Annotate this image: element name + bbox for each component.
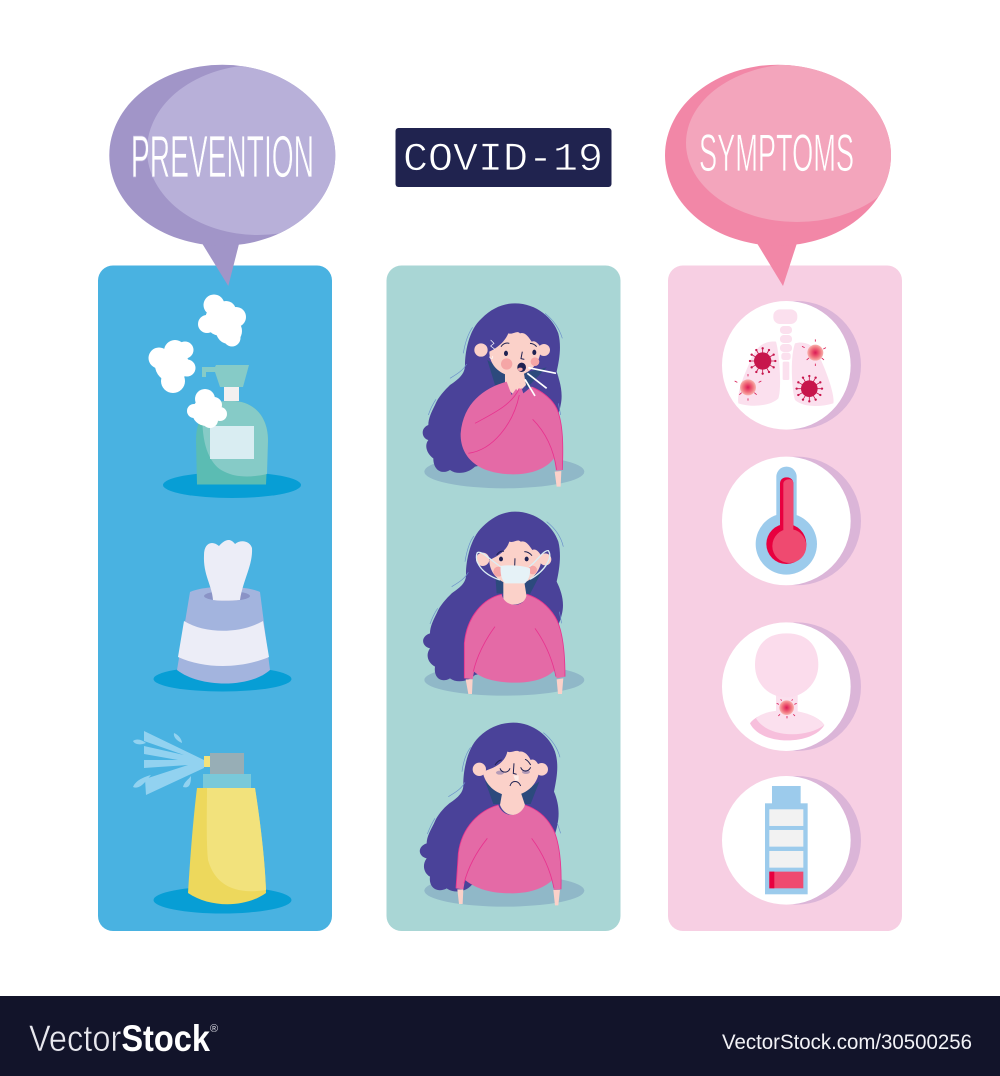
- registered mark: ®: [210, 1023, 218, 1035]
- heading: covid-19 badge: [396, 128, 612, 187]
- icon: sanitizer bottle with foam: [148, 294, 301, 498]
- heading: symptoms: SYMPTOMS: [699, 124, 854, 183]
- image id: VectorStock.com/30500256: [722, 1031, 972, 1054]
- speech bubble: prevention: PREVENTION: [131, 124, 314, 190]
- figure: woman tired with runny nose: [420, 723, 584, 907]
- panel: covid-19 people: [386, 266, 620, 931]
- figure: woman coughing: [423, 303, 584, 488]
- logo: VectorStock: VectorStock: [29, 1018, 210, 1059]
- panel: symptoms: [668, 266, 902, 931]
- symptom: infected lungs: [722, 301, 861, 430]
- speech bubble: prevention: [109, 64, 336, 286]
- symptom: high temperature thermometer: [722, 457, 861, 585]
- panel: prevention: [98, 266, 332, 931]
- speech bubble: symptoms: [665, 64, 908, 286]
- heading: covid-19 badge: COVID-19: [403, 138, 603, 183]
- symptom: low energy battery: [722, 776, 861, 905]
- footer: watermark bar: [0, 996, 1000, 1076]
- icon: tissue box: [154, 540, 292, 692]
- figure: woman wearing mask: [423, 512, 584, 696]
- icon: spray bottle: [133, 731, 292, 914]
- symptom: sore throat: [722, 622, 861, 751]
